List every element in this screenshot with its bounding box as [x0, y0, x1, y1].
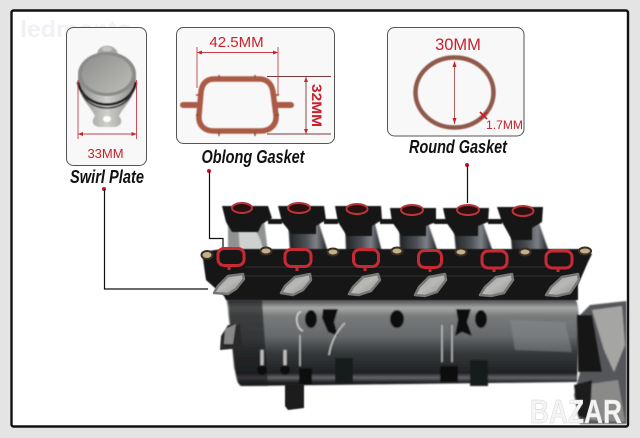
dimension: 30MM: 30MM: [435, 36, 481, 54]
manifold: brass bolts: [202, 248, 591, 259]
label: Oblong Gasket: Oblong Gasket: [202, 147, 305, 167]
panel: round gasket: [388, 28, 524, 136]
dimension: 42.5MM: 42.5MM: [209, 34, 264, 51]
panel: swirl plate: [66, 28, 146, 166]
manifold: top port rings: [232, 203, 534, 216]
manifold: swirl plates: [214, 274, 579, 296]
manifold: red oblong gaskets: [218, 248, 572, 272]
manifold: upper runners: [228, 220, 549, 252]
dimension: 42.5MM: [197, 34, 278, 95]
label: Swirl Plate: Swirl Plate: [70, 167, 144, 187]
leader line: round gasket: [465, 163, 469, 203]
label: Round Gasket: Round Gasket: [409, 137, 508, 157]
manifold: top flanges: [222, 206, 543, 240]
icon: oblong gasket: [183, 75, 291, 136]
manifold: side and bottom tabs: [220, 324, 304, 410]
dimension: 33MM: 33MM: [87, 146, 124, 161]
watermark: ledmonto: ledmonto: [20, 16, 132, 42]
intake manifold photo: [202, 203, 626, 424]
manifold: right end piece: [574, 301, 626, 424]
icon: swirl plate: [78, 46, 136, 127]
leader line: oblong gasket: [207, 169, 223, 248]
manifold: black rail: [202, 249, 592, 300]
panel: oblong gasket: [176, 28, 334, 144]
leader line: swirl plate: [102, 187, 208, 289]
dimension: 1.7MM: 1.7MM: [486, 118, 523, 132]
dimension: 32MM: [267, 76, 331, 134]
dimension: 32MM: 32MM: [309, 84, 324, 127]
icon: round gasket: [416, 58, 494, 128]
manifold: lower body: [226, 294, 579, 386]
